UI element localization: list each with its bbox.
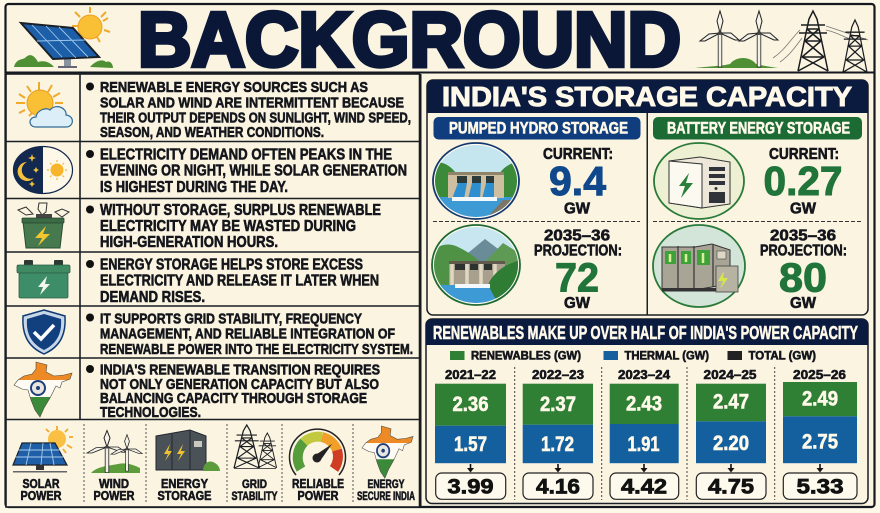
label: wind power: WIND bbox=[99, 477, 129, 491]
label: reliable power bbox=[292, 477, 344, 503]
bar: 2024-25: 2024–25 bbox=[704, 368, 757, 382]
label: reliable power: POWER bbox=[298, 489, 338, 503]
label: reliable power: RELIABLE bbox=[292, 477, 344, 491]
label: energy storage: STORAGE bbox=[158, 489, 212, 503]
stat: projected battery: 80 bbox=[779, 255, 827, 301]
icon: transmission towers bbox=[773, 11, 868, 72]
stat: projected battery: PROJECTION: bbox=[760, 243, 847, 260]
stat: projected pumped hydro bbox=[534, 228, 622, 312]
label: solar power: POWER bbox=[20, 489, 62, 503]
bar: 2024-25 bbox=[696, 368, 766, 499]
icon: solar power bbox=[13, 426, 73, 472]
heading: storage capacity: INDIA'S STORAGE CAPACITY bbox=[442, 81, 852, 112]
bar: 2023-24: 2.43 bbox=[626, 392, 662, 416]
icon: grid stability bbox=[234, 425, 277, 469]
bar: 2022-23: 4.16 bbox=[536, 476, 580, 498]
divider between columns bbox=[420, 74, 422, 507]
stat: projected pumped hydro: 72 bbox=[555, 255, 599, 301]
bar: 2025-26: 2.49 bbox=[802, 388, 838, 411]
text: intermittency: RENEWABLE ENERGY SOURCES SUCH AS bbox=[100, 79, 368, 96]
icon: India map bbox=[14, 362, 74, 419]
text: India's transition bbox=[86, 362, 380, 421]
icon: day and night bbox=[14, 146, 72, 194]
bar: 2024-25: 2.47 bbox=[713, 391, 749, 414]
text: India's transition: BALANCING CAPACITY THROUGH STORAGE bbox=[100, 391, 367, 407]
icon strip bbox=[13, 424, 415, 503]
stat: current battery bbox=[764, 146, 842, 218]
header rule bbox=[6, 72, 874, 74]
text: India's transition: INDIA'S RENEWABLE TRANSITION REQUIRES bbox=[100, 362, 380, 378]
text: demand peaks bbox=[86, 146, 407, 196]
bar: 2024-25: 4.75 bbox=[708, 476, 754, 498]
bar: 2021-22 bbox=[435, 368, 506, 499]
text: India's transition: TECHNOLOGIES. bbox=[100, 405, 201, 421]
stat: current pumped hydro bbox=[543, 146, 613, 218]
panel: key points bbox=[6, 74, 420, 507]
bar: 2023-24: 2023–24 bbox=[618, 368, 670, 382]
bar: 2021-22: 2.36 bbox=[452, 393, 488, 416]
label: wind power: POWER bbox=[94, 489, 134, 503]
bar: 2023-24: 1.91 bbox=[628, 433, 660, 456]
text: grid stability bbox=[86, 310, 413, 358]
stat: current battery: CURRENT: bbox=[769, 146, 839, 163]
icon: reliable power gauge bbox=[290, 429, 346, 475]
icon: wind power bbox=[87, 430, 142, 473]
legend: THERMAL (GW) bbox=[624, 350, 709, 362]
image: current battery unit bbox=[654, 143, 744, 219]
bar: 2025-26: 2.75 bbox=[802, 430, 838, 453]
text: demand peaks: IS HIGHEST DURING THE DAY. bbox=[100, 179, 288, 196]
bar: 2021-22: 1.57 bbox=[454, 433, 487, 456]
text: demand peaks: EVENING OR NIGHT, WHILE SOLAR GENERATION bbox=[100, 162, 407, 180]
pill: pumped hydro bbox=[434, 117, 640, 140]
image: current hydro dam bbox=[432, 142, 520, 220]
label: energy secure India bbox=[357, 479, 415, 503]
label: wind power bbox=[94, 477, 134, 503]
stat: projected battery: GW bbox=[790, 295, 816, 312]
text: surplus wasted bbox=[86, 202, 381, 251]
label: energy secure India: SECURE INDIA bbox=[357, 491, 415, 503]
label: solar power: SOLAR bbox=[22, 477, 60, 491]
bar: 2022-23: 1.72 bbox=[541, 433, 574, 456]
stat: current pumped hydro: GW bbox=[564, 201, 590, 218]
panel: India's storage capacity bbox=[427, 80, 868, 315]
text: energy storage helps: DEMAND RISES. bbox=[100, 289, 205, 306]
text: India's transition: NOT ONLY GENERATION CAPACITY BUT ALSO bbox=[100, 377, 379, 393]
icon: energy storage bbox=[156, 430, 220, 471]
text: grid stability: IT SUPPORTS GRID STABILITY, FREQUENCY bbox=[100, 310, 362, 328]
label: grid stability: GRID bbox=[242, 477, 267, 491]
icon: wasted electricity bin bbox=[18, 203, 69, 248]
bar: 2022-23 bbox=[523, 368, 593, 499]
label: grid stability: STABILITY bbox=[232, 489, 278, 503]
stat: projected pumped hydro: PROJECTION: bbox=[534, 243, 622, 260]
legend: TOTAL (GW) bbox=[748, 350, 816, 362]
icon: energy secure India bbox=[362, 426, 415, 480]
text: surplus wasted: WITHOUT STORAGE, SURPLUS RENEWABLE bbox=[100, 202, 381, 219]
bar: 2022-23: 2022–23 bbox=[532, 368, 584, 382]
panel: power capacity chart bbox=[426, 319, 868, 504]
text: grid stability: MANAGEMENT, AND RELIABLE INTEGRATION OF bbox=[100, 326, 395, 342]
label: energy storage bbox=[158, 477, 212, 503]
text: intermittency: SOLAR AND WIND ARE INTERMITTENT BECAUSE bbox=[100, 94, 404, 112]
title banner bbox=[14, 0, 868, 83]
text: energy storage helps: ELECTRICITY AND RELEASE IT LATER WHEN bbox=[100, 272, 379, 290]
stat: current battery: 0.27 bbox=[764, 158, 842, 204]
bar: 2024-25: 2.20 bbox=[713, 432, 749, 455]
stat: projected pumped hydro: 2035–36 bbox=[544, 228, 610, 245]
icon: wind turbines bbox=[695, 11, 778, 68]
text: demand peaks: ELECTRICITY DEMAND OFTEN PEAKS IN THE bbox=[100, 146, 392, 164]
icon: solar panel with sun bbox=[14, 7, 113, 68]
bar: 2022-23: 2.37 bbox=[540, 393, 576, 416]
label: grid stability bbox=[232, 477, 278, 503]
label: energy storage: ENERGY bbox=[161, 477, 209, 491]
stat: current pumped hydro: 9.4 bbox=[549, 158, 606, 204]
text: surplus wasted: ELECTRICITY MAY BE WASTED DURING bbox=[100, 218, 356, 235]
legend bbox=[450, 350, 816, 362]
icon: sun and cloud bbox=[16, 82, 72, 127]
stat: current battery: GW bbox=[790, 201, 816, 218]
text: grid stability: RENEWABLE POWER INTO THE ELECTRICITY SYSTEM. bbox=[100, 341, 413, 358]
stat: projected battery bbox=[760, 228, 847, 312]
text: intermittency: THEIR OUTPUT DEPENDS ON SUNLIGHT, WIND SPEED, bbox=[100, 110, 411, 126]
stat: projected battery: 2035–36 bbox=[770, 228, 836, 245]
stat: current pumped hydro: CURRENT: bbox=[543, 146, 613, 163]
bar: 2025-26: 2025–26 bbox=[793, 368, 846, 382]
bar: 2023-24 bbox=[610, 368, 679, 499]
text: intermittency bbox=[86, 79, 411, 141]
legend: RENEWABLES (GW) bbox=[471, 350, 581, 362]
icon: shield with check bbox=[23, 310, 65, 354]
stat: projected pumped hydro: GW bbox=[564, 295, 590, 312]
image: projected battery containers bbox=[653, 225, 745, 307]
bar: 2021-22: 2021–22 bbox=[445, 368, 496, 382]
bar: 2025-26: 5.33 bbox=[796, 476, 844, 498]
pill: pumped hydro: PUMPED HYDRO STORAGE bbox=[449, 119, 628, 138]
bar: 2023-24: 4.42 bbox=[621, 476, 667, 498]
text: energy storage helps bbox=[86, 256, 379, 306]
bar: 2025-26 bbox=[783, 368, 857, 499]
label: energy secure India: ENERGY bbox=[368, 479, 405, 491]
text: intermittency: SEASON, AND WEATHER CONDITIONS. bbox=[100, 125, 324, 141]
text: energy storage helps: ENERGY STORAGE HELPS STORE EXCESS bbox=[100, 256, 363, 274]
image: projected hydro dam bbox=[430, 225, 525, 307]
icon: green battery bbox=[17, 260, 70, 298]
bar: 2021-22: 3.99 bbox=[448, 476, 494, 498]
label: solar power bbox=[20, 477, 62, 503]
text: surplus wasted: HIGH-GENERATION HOURS. bbox=[100, 234, 278, 251]
